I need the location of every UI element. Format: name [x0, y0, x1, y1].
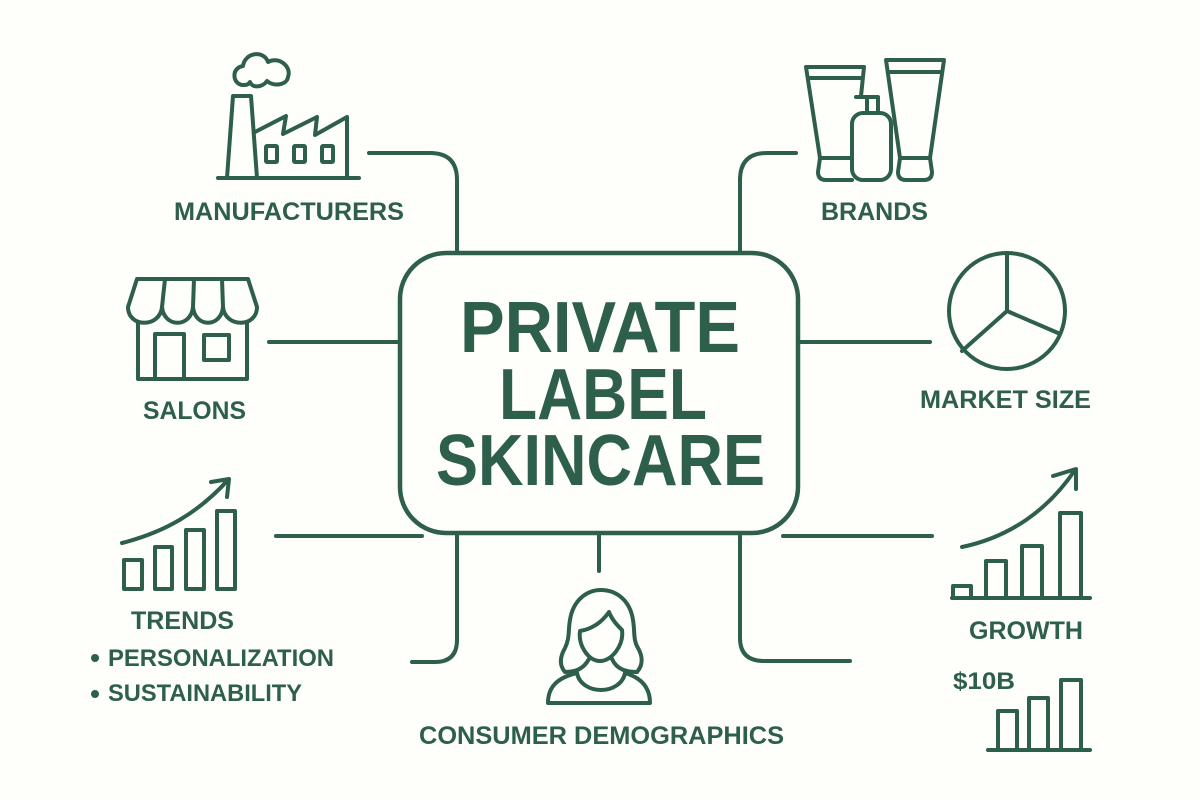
icon: factory [218, 54, 359, 178]
trends text block: PERSONALIZATION [108, 645, 334, 672]
icon: skincare tubes and bottle [806, 60, 944, 180]
label: consumer demographics: CONSUMER DEMOGRAPHICS [419, 722, 784, 750]
trends text block [91, 607, 334, 707]
label: manufacturers: MANUFACTURERS [174, 198, 404, 226]
connector: consumer demographics [597, 534, 601, 571]
icon: trends bar chart with arrow [122, 479, 235, 589]
connector: market size [800, 340, 930, 344]
label: brands: BRANDS [821, 198, 928, 226]
icon: growth bar chart with arrow [952, 469, 1090, 598]
central box: private label skincare: PRIVATE [460, 288, 740, 368]
label: salons: SALONS [143, 397, 246, 425]
label: growth: GROWTH [969, 617, 1083, 645]
connector: manufacturers [369, 153, 457, 251]
connector: brands [740, 153, 796, 251]
icon: pie chart [949, 253, 1065, 369]
central box: private label skincare [400, 253, 798, 533]
central box: private label skincare: SKINCARE [436, 421, 765, 501]
icon: consumer woman [548, 590, 650, 703]
connector: trends [276, 534, 422, 538]
connector: growth lower [740, 534, 850, 661]
icon: salon storefront [128, 279, 257, 379]
connector: growth [783, 534, 932, 538]
label: market size: MARKET SIZE [920, 386, 1091, 414]
trends text block: SUSTAINABILITY [108, 680, 302, 707]
connector: salons [269, 340, 398, 344]
icon: $10B bar chart [988, 680, 1090, 750]
connector: trends lower [412, 534, 457, 662]
label: $10B: $10B [953, 668, 1015, 695]
central box: private label skincare: LABEL [499, 355, 707, 435]
trends text block: TRENDS [131, 607, 234, 635]
